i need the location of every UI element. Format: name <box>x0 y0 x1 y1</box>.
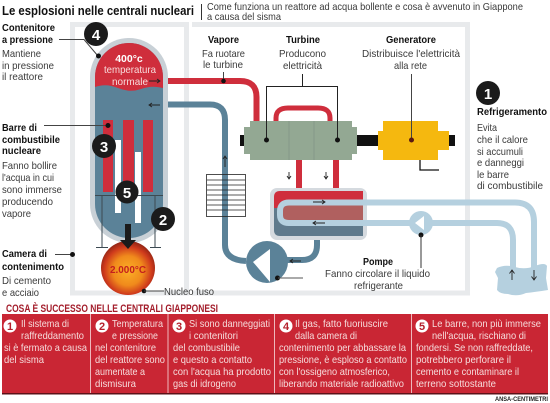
arrows: reactor flow <box>149 79 160 107</box>
main pump <box>246 241 288 283</box>
label: fuel rods: combustibile <box>2 134 60 146</box>
label: fuel rods: l'acqua in cui <box>2 172 54 184</box>
label: pumps <box>325 256 430 292</box>
step 2 <box>95 318 165 390</box>
badge 1: 1 <box>484 86 492 103</box>
arrow: into pump <box>290 259 301 263</box>
label: fuel rods <box>2 122 62 220</box>
step 3: del combustibile <box>173 342 240 354</box>
step 5: terreno sottostante <box>416 378 496 390</box>
shaft <box>357 135 379 146</box>
arrows: water <box>510 270 536 280</box>
step 4: 4 <box>283 321 290 333</box>
leader: pressure vessel <box>59 40 101 58</box>
step 5: nell'acqua, rischiano di <box>432 330 526 342</box>
dome temperature label: temperatura <box>104 64 156 76</box>
step 5 <box>416 318 541 390</box>
label: molten core: Nucleo fuso <box>164 286 214 298</box>
badge 3 <box>92 134 116 158</box>
step 5: potrebbero perforare il <box>416 354 511 366</box>
heat exchanger fins <box>206 174 246 216</box>
panel: what happened <box>2 314 548 394</box>
step 4: dalla camera di <box>295 330 357 342</box>
label: cooling: Evita <box>477 122 497 134</box>
label: generator <box>362 34 460 72</box>
label: pumps: refrigerante <box>354 280 403 292</box>
badge 5 <box>116 180 138 204</box>
arrows: exhaust down <box>287 172 328 179</box>
step 3: e questo a contatto <box>173 354 252 366</box>
dome temperature label: 400°c <box>115 53 143 65</box>
label: fuel rods: sono immerse <box>2 184 62 196</box>
arrows: condenser flow <box>313 200 325 225</box>
label: pumps: Pompe <box>363 256 393 268</box>
label: pressure vessel: il reattore <box>2 71 43 83</box>
dome temperature label <box>104 53 156 88</box>
step 2: e pressione <box>112 330 158 342</box>
label: containment chamber <box>2 248 64 299</box>
leader: fuel rods <box>44 123 110 128</box>
label: pressure vessel <box>2 22 55 83</box>
label: cooling: le barre <box>477 169 509 181</box>
leader: generator <box>409 74 414 142</box>
step 4: Il gas, fatto fuoriuscire <box>295 318 388 330</box>
red steam dome <box>95 43 163 91</box>
fuel rods <box>103 120 153 192</box>
label: steam: le turbine <box>203 59 243 71</box>
label: fuel rods: Fanno bollire <box>2 160 57 172</box>
label: pressure vessel: Mantiene <box>2 48 41 60</box>
step 1: Il sistema di <box>21 318 69 330</box>
molten core: 2.000°C <box>110 264 146 276</box>
label: generator: alla rete <box>394 60 427 72</box>
badge 4: 4 <box>92 27 101 44</box>
step 2: Temperatura <box>112 318 163 330</box>
label: turbine: elettricità <box>283 60 322 72</box>
label: fuel rods: Barre di <box>2 122 37 134</box>
title: Le esplosioni nelle centrali nucleari <box>2 4 194 18</box>
leader: cooling pump <box>418 232 424 268</box>
label: pressure vessel: a pressione <box>2 34 53 46</box>
step 1: si è fermato a causa <box>4 342 87 354</box>
support structure <box>95 195 163 248</box>
label: steam <box>202 34 245 71</box>
steam pipe <box>166 81 256 123</box>
leader: turbine bracket <box>264 74 340 142</box>
leader: steam <box>221 72 226 83</box>
subtitle <box>201 1 523 23</box>
label: turbine: Turbine <box>286 34 320 46</box>
label: pressure vessel: in pressione <box>2 60 54 72</box>
label: pressure vessel: Contenitore <box>2 22 55 34</box>
water source <box>495 264 548 295</box>
step 3: i contenitori <box>189 330 238 342</box>
turbine crossover pipe <box>276 108 330 122</box>
subtitle: a causa del sisma <box>207 11 281 23</box>
step 3: 3 <box>176 321 182 333</box>
panel: turbine building frame <box>192 24 468 293</box>
bottom heading: COSA È SUCCESSO NELLE CENTRALI GIAPPONESI <box>6 302 218 315</box>
badge 4 <box>84 22 108 46</box>
label: cooling: di combustibile <box>477 180 543 192</box>
step 2: del reattore sono <box>95 354 165 366</box>
step 2: aumentate a <box>95 366 145 378</box>
molten core <box>101 241 155 295</box>
generator <box>378 121 455 160</box>
badge 2: 2 <box>159 212 167 229</box>
cooling pipes <box>365 202 534 268</box>
label: containment chamber: contenimento <box>2 261 64 273</box>
step 4: pressione, è esploso a contatto <box>279 354 407 366</box>
step 1 <box>4 318 87 366</box>
step 3: gas di idrogeno <box>173 378 236 390</box>
feedwater pipe <box>166 104 246 261</box>
turbine <box>240 121 357 160</box>
step 3: Si sono danneggiati <box>189 318 270 330</box>
label: cooling: si accumuli <box>477 146 523 158</box>
label: pumps: Fanno circolare il liquido <box>325 268 430 280</box>
label: cooling: che il calore <box>477 134 528 146</box>
step 2: 2 <box>99 321 105 333</box>
label: steam: Fa ruotare <box>202 48 245 60</box>
badge 3: 3 <box>100 139 108 156</box>
label: containment chamber: Di cemento <box>2 275 51 287</box>
label: steam: Vapore <box>208 34 239 46</box>
step 4: contenimento per abbassare la <box>279 342 406 354</box>
leader: main pump <box>275 276 303 280</box>
badge 1 <box>476 81 500 105</box>
return pipe to pump <box>285 240 317 260</box>
label: molten core <box>142 286 214 298</box>
panel: containment chamber frame <box>72 24 186 293</box>
step 4 <box>279 318 407 390</box>
step 2: dismisura <box>95 378 136 390</box>
reactor vessel <box>90 38 168 248</box>
step 3: con l'acqua ha prodotto <box>173 366 271 378</box>
cooling pump <box>409 211 433 235</box>
label: generator: Distribuisce l'elettricità <box>362 48 460 60</box>
dome temperature label: normale <box>112 76 148 88</box>
step 5: 5 <box>419 321 425 333</box>
label: cooling <box>477 106 547 192</box>
step 2: nel contenitore <box>95 342 156 354</box>
badge 2 <box>151 207 175 231</box>
arrow: feedwater up <box>223 156 227 167</box>
label: generator: Generatore <box>386 34 436 46</box>
turbine exhaust pipes <box>296 159 339 191</box>
label: containment chamber: Camera di <box>2 248 47 260</box>
step 4: con l'ossigeno atmosferico, <box>279 366 390 378</box>
step 3 <box>172 318 271 390</box>
generator output line <box>420 160 439 170</box>
step 1: raffreddamento <box>21 330 84 342</box>
step 4: liberando materiale radioattivo <box>279 378 404 390</box>
condenser <box>270 188 367 240</box>
label: cooling: e danneggi <box>477 157 524 169</box>
control rods <box>115 140 141 223</box>
label: containment chamber: e acciaio <box>2 287 39 299</box>
step 1: del sisma <box>4 354 44 366</box>
label: turbine: Producono <box>279 48 326 60</box>
label: fuel rods: producendo <box>2 196 53 208</box>
leader: containment chamber <box>55 252 75 257</box>
step 5: cemento e contaminare il <box>416 366 519 378</box>
label: turbine <box>279 34 326 72</box>
step 5: fondersi. Se non raffreddate, <box>416 342 533 354</box>
label: fuel rods: nucleare <box>2 145 41 157</box>
badge 5: 5 <box>123 185 131 202</box>
arrow: core falling <box>120 224 136 249</box>
label: fuel rods: vapore <box>2 208 31 220</box>
step 1: 1 <box>7 321 13 333</box>
